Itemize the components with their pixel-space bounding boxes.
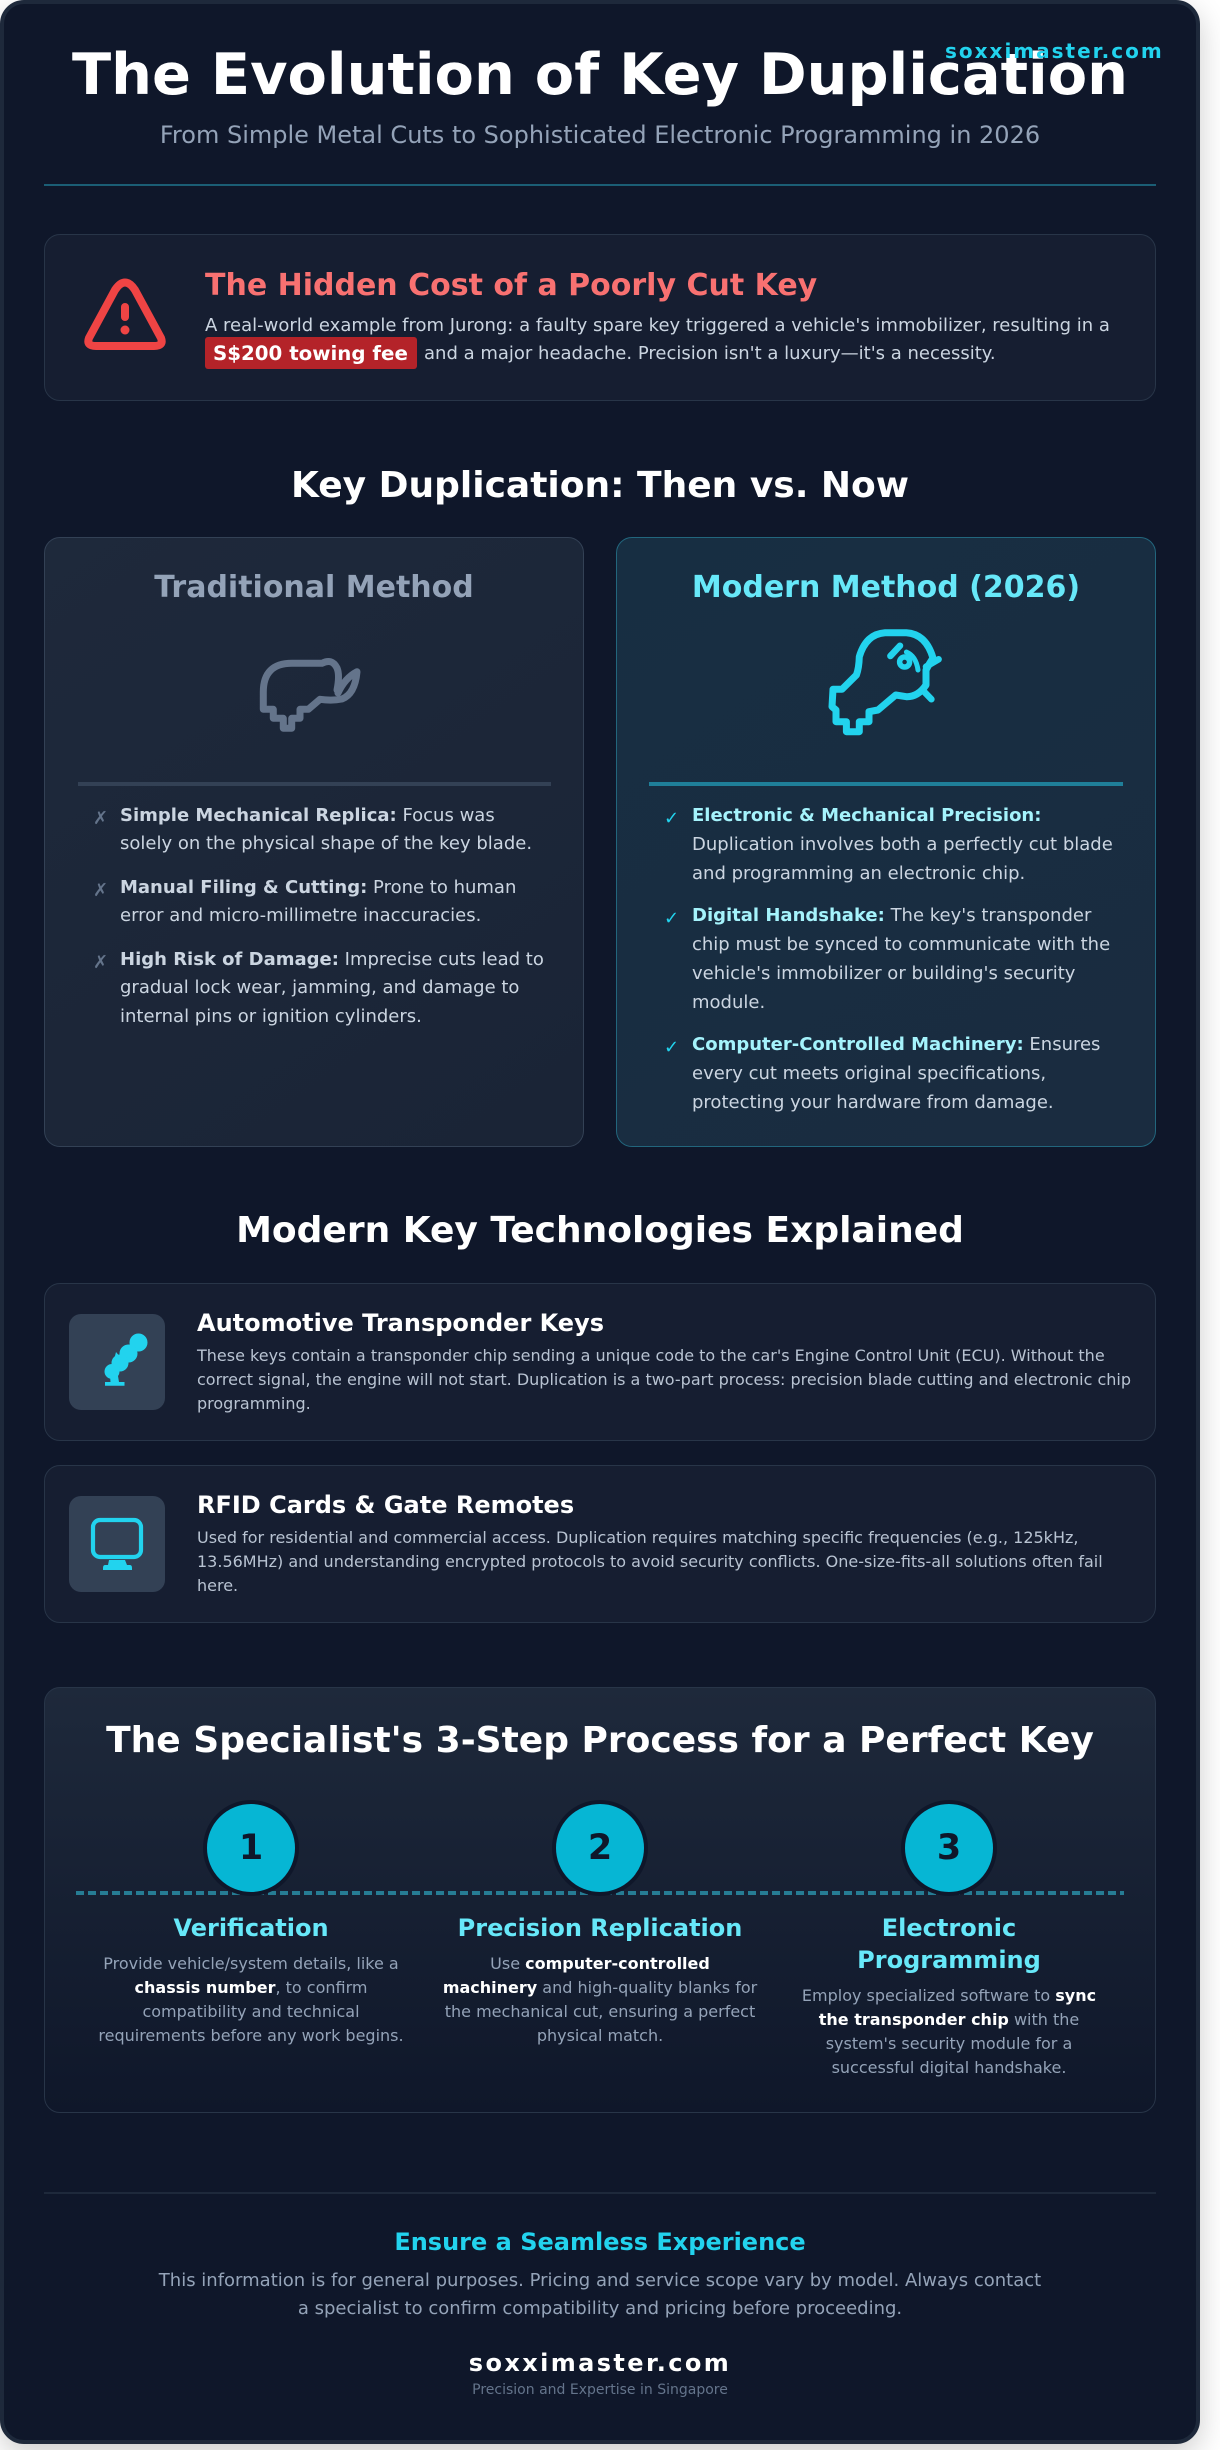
footer heading: Ensure a Seamless Experience: [394, 2228, 806, 2256]
item text: Manual Filing & Cutting: Prone to human: [120, 877, 516, 898]
step 3 text: Employ specialized software to sync: [802, 1986, 1096, 2004]
item text: Computer-Controlled Machinery: Ensures: [692, 1034, 1100, 1055]
item text: module.: [692, 992, 765, 1013]
alert body: [205, 315, 1110, 369]
watermark: soxximaster.com: [945, 39, 1164, 63]
panel: rfid cards: [44, 1465, 1156, 1623]
item text: vehicle's immobilizer or building's security: [692, 963, 1075, 984]
panel: automotive transponder keys: [44, 1283, 1156, 1441]
item text: [692, 805, 1113, 884]
rfid text: [197, 1528, 1103, 1595]
step 3 text: [802, 1986, 1096, 2076]
icon box: rfid: [69, 1496, 165, 1592]
item text: Duplication involves both a perfectly cut blade: [692, 834, 1113, 855]
step 2 text: machinery and high-quality blanks for: [443, 1978, 757, 1996]
panel: 3-step process: [44, 1687, 1156, 2113]
modern list: [664, 805, 1113, 1113]
traditional heading: Traditional Method: [154, 570, 474, 605]
step 1 badge: 1: [239, 1828, 263, 1868]
icon: warning triangle: [84, 278, 166, 350]
item: ✗: [93, 808, 108, 829]
step 1 text: compatibility and technical: [142, 2002, 360, 2020]
step 3 title: Programming: [857, 1946, 1041, 1974]
step 1 text: [98, 1954, 404, 2044]
item text: chip must be synced to communicate with the: [692, 934, 1110, 955]
item text: [692, 1034, 1100, 1113]
item text: Digital Handshake: The key's transponder: [692, 905, 1091, 926]
step 1 text: chassis number, to confirm: [135, 1978, 367, 1996]
item text: error and micro-millimetre inaccuracies.: [120, 905, 481, 926]
item: ✗: [93, 952, 108, 973]
rfid text: Used for residential and commercial access. Duplication requires matching specific frequencies (e.g., 125kHz,: [197, 1528, 1078, 1547]
step 2 title: Precision Replication: [458, 1914, 742, 1942]
highlight: towing fee: S$200 towing fee: [213, 342, 408, 365]
item text: [120, 877, 516, 926]
item: ✓: [664, 1037, 679, 1058]
footer tagline: Precision and Expertise in Singapore: [472, 2382, 728, 2398]
step 1 text: requirements before any work begins.: [98, 2026, 404, 2044]
step 2 text: Use computer-controlled: [490, 1954, 710, 1972]
footer disclaimer: This information is for general purposes. Pricing and service scope vary by model. Always contact: [159, 2270, 1041, 2290]
step 1 text: Provide vehicle/system details, like a: [103, 1954, 399, 1972]
alert heading: The Hidden Cost of a Poorly Cut Key: [205, 268, 817, 303]
panel: traditional method: [44, 537, 584, 1147]
step 3 title: Electronic: [882, 1914, 1016, 1942]
alert line 2: and a major headache. Precision isn't a luxury—it's a necessity.: [424, 343, 996, 364]
item text: solely on the physical shape of the key blade.: [120, 833, 532, 854]
transponder text: These keys contain a transponder chip sending a unique code to the car's Engine Control Unit (ECU). Without the: [197, 1346, 1105, 1365]
item text: [120, 805, 532, 854]
step 3 title: [857, 1914, 1041, 1974]
icon: transponder chip: [104, 1334, 148, 1386]
step 3 text: system's security module for a: [826, 2034, 1072, 2052]
rfid text: 13.56MHz) and understanding encrypted protocols to avoid security conflicts. One-size-fits-all solutions often fail: [197, 1552, 1103, 1571]
rfid text: here.: [197, 1576, 238, 1595]
footer disclaimer: a specialist to confirm compatibility and pricing before proceeding.: [298, 2298, 902, 2319]
footer disclaimer: [158, 2270, 1041, 2319]
step 3 text: the transponder chip with the: [819, 2010, 1079, 2028]
item text: protecting your hardware from damage.: [692, 1092, 1054, 1113]
item text: every cut meets original specifications,: [692, 1063, 1046, 1084]
subtitle: From Simple Metal Cuts to Sophisticated Electronic Programming in 2026: [160, 121, 1040, 149]
transponder text: programming.: [197, 1394, 311, 1413]
heading: modern technologies: Modern Key Technologies Explained: [236, 1210, 964, 1251]
traditional list: [93, 805, 544, 1027]
item text: Simple Mechanical Replica: Focus was: [120, 805, 495, 826]
item text: gradual lock wear, jamming, and damage to: [120, 977, 519, 998]
step 2 text: physical match.: [537, 2026, 663, 2044]
panel: hidden cost alert: [44, 234, 1156, 401]
step 2 badge: [552, 1800, 648, 1896]
item: ✗: [93, 880, 108, 901]
icon: electronic key: [828, 629, 942, 736]
item text: [692, 905, 1110, 1013]
icon: monitor: [90, 1518, 144, 1570]
step 1 title: Verification: [173, 1914, 329, 1942]
heading: then vs now: Key Duplication: Then vs. Now: [291, 464, 909, 506]
step 2 badge: 2: [588, 1828, 612, 1868]
step 3 text: successful digital handshake.: [832, 2058, 1066, 2076]
rfid heading: RFID Cards & Gate Remotes: [197, 1491, 574, 1519]
item: ✓: [664, 908, 679, 929]
modern heading: Modern Method (2026): [692, 570, 1080, 605]
footer site name: soxximaster.com: [469, 2349, 731, 2377]
item text: High Risk of Damage: Imprecise cuts lead to: [120, 949, 544, 970]
transponder text: correct signal, the engine will not start. Duplication is a two-part process: precision blade cutting and electronic chip: [197, 1370, 1131, 1389]
title: The Evolution of Key Duplication: [72, 41, 1128, 108]
transponder heading: Automotive Transponder Keys: [197, 1309, 604, 1337]
item text: and programming an electronic chip.: [692, 863, 1025, 884]
alert line 1: A real-world example from Jurong: a faulty spare key triggered a vehicle's immobilizer, resulting in a: [205, 315, 1110, 336]
item: ✓: [664, 808, 679, 829]
step 2 text: [443, 1954, 758, 2044]
icon box: transponder: [69, 1314, 165, 1410]
panel: modern method: [616, 537, 1156, 1147]
highlight: towing fee: [205, 337, 417, 369]
icon: mechanical key: [260, 658, 360, 732]
process heading: The Specialist's 3-Step Process for a Perfect Key: [106, 1720, 1094, 1760]
step 3 badge: [901, 1800, 997, 1896]
item text: [120, 949, 544, 1027]
transponder text: [196, 1346, 1131, 1413]
step 1 badge: [203, 1800, 299, 1896]
step 2 text: the mechanical cut, ensuring a perfect: [445, 2002, 755, 2020]
step 3 badge: 3: [937, 1828, 961, 1868]
item text: Electronic & Mechanical Precision:: [692, 805, 1041, 826]
item text: internal pins or ignition cylinders.: [120, 1006, 422, 1027]
